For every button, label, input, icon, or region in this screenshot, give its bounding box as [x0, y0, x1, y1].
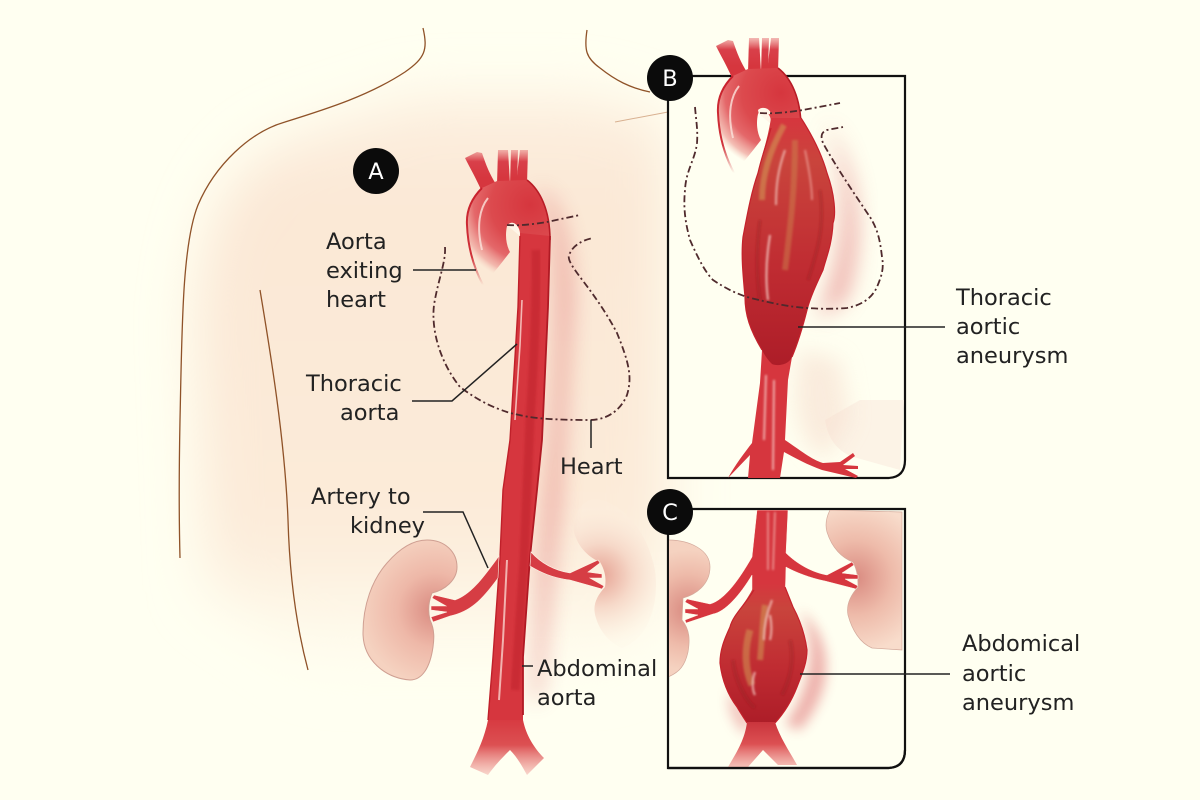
label: aorta exiting heart: exiting	[326, 258, 403, 284]
badge A	[353, 148, 399, 194]
label: abdominal aortic aneurysm: aortic	[962, 661, 1026, 687]
label: aorta exiting heart: Aorta	[326, 229, 387, 255]
badge A: A	[368, 159, 384, 185]
torso skin shading	[195, 95, 668, 670]
badge C: C	[662, 500, 678, 526]
panel C frame	[668, 509, 905, 768]
label: thoracic aorta: aorta	[340, 400, 399, 426]
right renal artery	[530, 552, 604, 589]
panel C: abdominal aneurysm	[668, 510, 902, 767]
label: abdominal aorta: aorta	[537, 685, 596, 711]
leader lines	[412, 270, 950, 674]
badge B	[647, 55, 693, 101]
badge C	[647, 489, 693, 535]
aorta glow	[532, 190, 572, 700]
kidneys in panel A	[363, 499, 656, 680]
dashed outline: heart	[433, 215, 630, 420]
label: thoracic aortic aneurysm: Thoracic	[955, 285, 1052, 311]
aorta: arch and main vessel	[431, 150, 604, 775]
label: heart: Heart	[560, 454, 623, 480]
body outline	[179, 28, 668, 670]
left renal artery	[431, 556, 499, 622]
label: abdominal aortic aneurysm: Abdomical	[962, 631, 1080, 657]
label: abdominal aortic aneurysm: aneurysm	[962, 690, 1074, 716]
label: artery to kidney: Artery to	[311, 484, 411, 510]
label: aorta exiting heart: heart	[326, 287, 386, 313]
panel B: thoracic aneurysm	[684, 38, 904, 478]
label: thoracic aortic aneurysm: aneurysm	[956, 343, 1068, 369]
panel C bottom edge	[668, 750, 905, 768]
label: abdominal aorta: Abdominal	[537, 656, 657, 682]
panel B frame	[668, 76, 905, 478]
badge B: B	[662, 66, 678, 92]
label: artery to kidney: kidney	[350, 513, 425, 539]
label: thoracic aorta: Thoracic	[305, 371, 402, 397]
label: thoracic aortic aneurysm: aortic	[956, 314, 1020, 340]
